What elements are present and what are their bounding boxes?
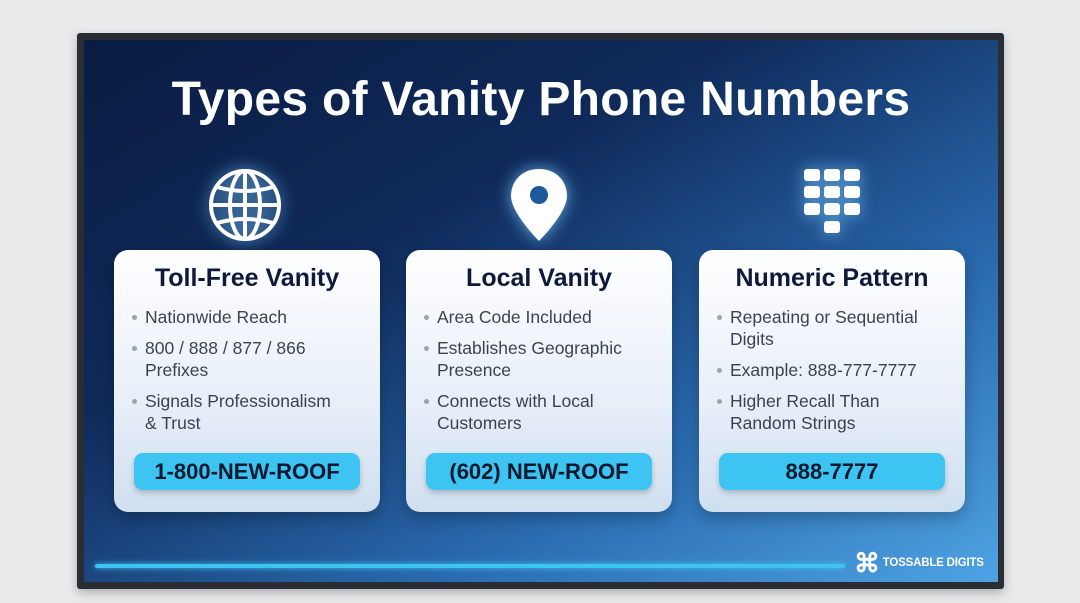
icon: location pin <box>501 158 577 247</box>
bullet list <box>424 307 622 433</box>
example badge: 888-7777 <box>786 459 878 484</box>
bullet list: Repeating or Sequential Digits <box>730 307 918 349</box>
icon: globe <box>199 158 291 250</box>
icon: keypad <box>796 160 868 242</box>
logo: TOSSABLE DIGITS <box>883 557 984 569</box>
bullet list: Connects with Local Customers <box>437 391 594 433</box>
bullet list: & Trust <box>145 413 200 433</box>
example badge: (602) NEW-ROOF <box>449 459 629 484</box>
bullet list: Signals Professionalism <box>145 391 331 411</box>
panel: toll-free <box>114 250 380 512</box>
title: Types of Vanity Phone Numbers <box>172 73 910 126</box>
panel: local <box>406 250 672 512</box>
screen <box>84 40 998 582</box>
heading: Numeric Pattern <box>735 264 929 292</box>
example badge <box>719 453 945 490</box>
bullet list <box>717 307 918 433</box>
example badge <box>134 453 360 490</box>
bullet list: Random Strings <box>730 413 855 433</box>
bullet list <box>132 307 331 433</box>
logo <box>854 548 984 578</box>
bullet list: 800 / 888 / 877 / 866 Prefixes <box>145 338 306 380</box>
heading: Toll-Free Vanity <box>155 264 339 292</box>
panel: numeric <box>699 250 965 512</box>
progress line <box>95 564 845 568</box>
bullet list: Higher Recall Than <box>730 391 879 411</box>
heading: Local Vanity <box>466 264 612 292</box>
icon: logo mark: ⌘ <box>854 548 880 578</box>
bullet list: Example: 888-777-7777 <box>730 360 917 380</box>
tv frame <box>77 33 1004 589</box>
example badge <box>426 453 652 490</box>
example badge: 1-800-NEW-ROOF <box>154 459 340 484</box>
bullet list: Establishes Geographic Presence <box>437 338 622 380</box>
bullet list: Area Code Included <box>437 307 592 327</box>
bullet list: Nationwide Reach <box>145 307 287 327</box>
